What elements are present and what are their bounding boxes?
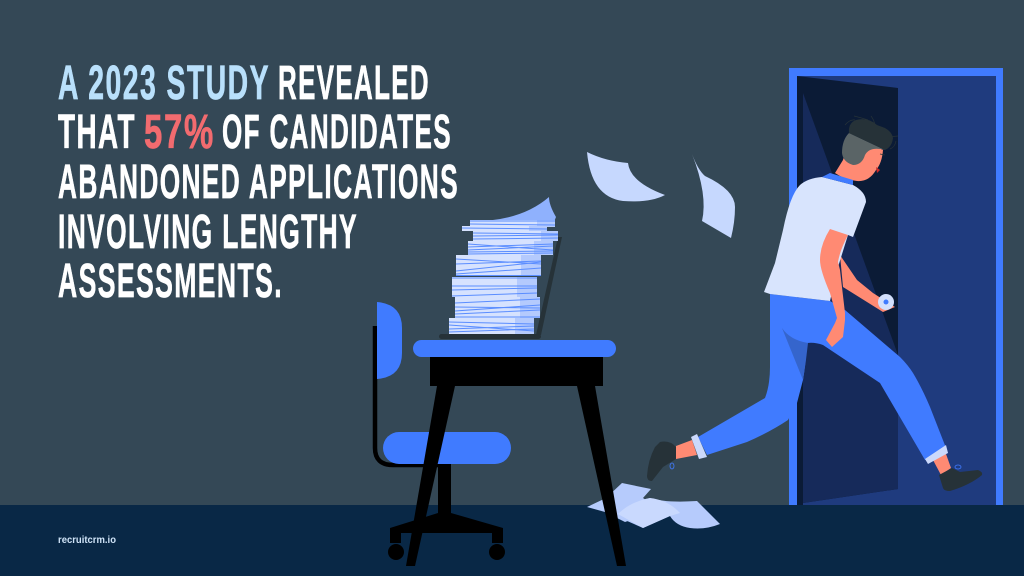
shoe laces bbox=[670, 463, 961, 469]
hair wisps bbox=[845, 116, 898, 155]
heading: OF CANDIDATES bbox=[222, 106, 452, 159]
paper stack bbox=[449, 197, 558, 334]
trousers bbox=[698, 294, 948, 460]
door bbox=[789, 68, 1003, 505]
collar bbox=[822, 173, 853, 185]
back cuff bbox=[691, 434, 707, 459]
dark hair bbox=[849, 119, 893, 150]
flying paper right bbox=[692, 154, 735, 238]
floor papers bbox=[587, 483, 720, 528]
chair bbox=[375, 302, 511, 560]
person bbox=[647, 116, 982, 491]
floor bbox=[0, 505, 1024, 576]
back ankle bbox=[676, 440, 697, 459]
far arm and hand bbox=[840, 255, 895, 312]
nose bbox=[876, 167, 880, 173]
back shoe bbox=[647, 442, 676, 481]
grey hair bbox=[842, 133, 885, 165]
laptop bbox=[439, 237, 562, 339]
heading: A 2023 STUDY bbox=[58, 57, 270, 110]
flying paper left bbox=[587, 152, 665, 201]
front ankle bbox=[933, 454, 951, 475]
shirt bbox=[764, 177, 866, 301]
heading: THAT bbox=[58, 106, 136, 159]
heading: 57% bbox=[144, 106, 215, 159]
heading: ABANDONED APPLICATIONS bbox=[58, 156, 459, 209]
neck and head bbox=[835, 135, 883, 181]
brand label: recruitcrm.io bbox=[58, 535, 116, 546]
heading: INVOLVING LENGTHY bbox=[58, 206, 358, 259]
front shoe bbox=[939, 468, 982, 491]
heading bbox=[58, 57, 459, 308]
near arm bbox=[820, 229, 848, 347]
front cuff bbox=[925, 445, 948, 464]
door knob bbox=[878, 294, 894, 310]
desk bbox=[406, 340, 626, 566]
heading: REVEALED bbox=[278, 57, 430, 110]
heading: ASSESSMENTS. bbox=[58, 255, 283, 308]
trouser shadow bbox=[782, 328, 808, 380]
